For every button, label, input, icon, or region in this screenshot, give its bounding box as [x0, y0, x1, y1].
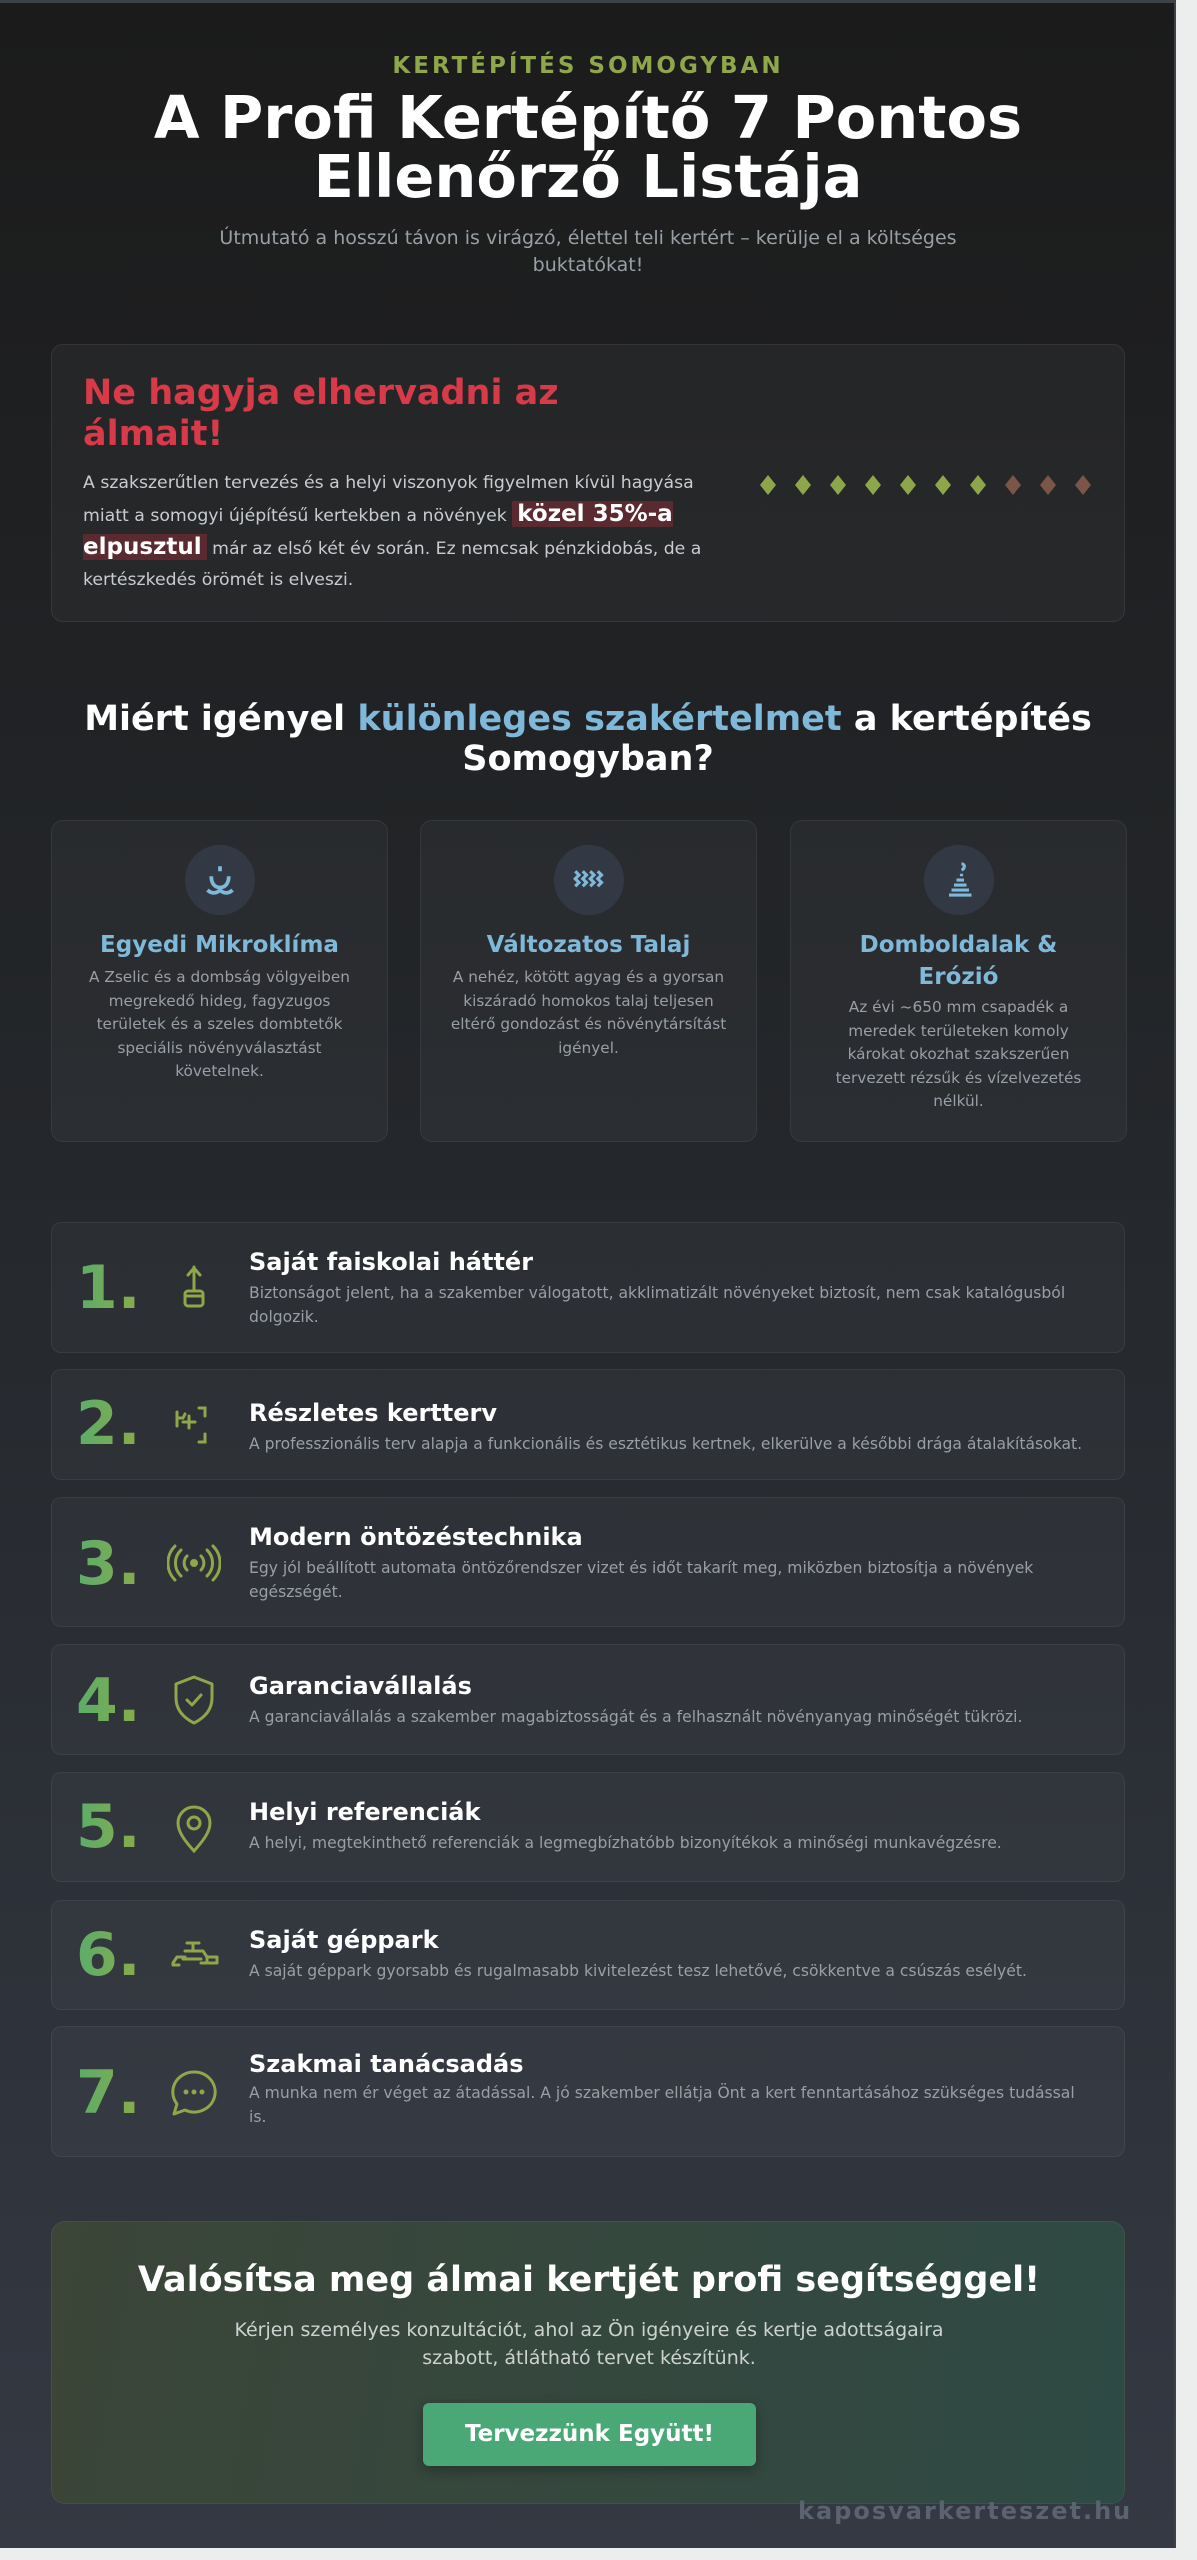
- icon: irrigation: [167, 1544, 221, 1582]
- item 7: A munka nem ér véget az átadással. A jó szakember ellátja Önt a kert fenntartásához szükséges tudással is.: [249, 2084, 1075, 2126]
- item 5: 5.: [76, 1792, 141, 1862]
- card: erozio: Az évi ~650 mm csapadék a meredek területeken komoly károkat okozhat szakszerűen tervezett rézsűk és vízelvezetés nélkül.: [836, 998, 1081, 1110]
- title: Ellenőrző Listája: [314, 142, 862, 211]
- footer url: kaposvarkerteszet.hu: [798, 2497, 1132, 2525]
- icon: plan: [176, 1406, 206, 1444]
- panel: CTA: [51, 2221, 1125, 2504]
- item 6: 6.: [76, 1920, 141, 1990]
- panel: alert: [51, 344, 1125, 622]
- item 1: Biztonságot jelent, ha a szakember válogatott, akklimatizált növényeket biztosít, nem csak katalógusból dolgozik.: [249, 1284, 1065, 1326]
- item 6: A saját géppark gyorsabb és rugalmasabb kivitelezést tesz lehetővé, csökkentve a csúszás esélyét.: [249, 1962, 1027, 1980]
- icon: slope: [924, 845, 994, 915]
- title: A Profi Kertépítő 7 Pontos: [154, 83, 1022, 152]
- alert heading: Ne hagyja elhervadni az álmait!: [83, 373, 559, 454]
- card: mikroklima: A Zselic és a dombság völgyeiben megrekedő hideg, fagyzugos területek és a szeles dombtetők speciális növényválasztást követelnek.: [89, 968, 350, 1080]
- card: erozio: Domboldalak &: [860, 932, 1057, 958]
- item 6: [51, 1900, 1125, 2010]
- CTA heading: Valósítsa meg álmai kertjét profi segítséggel!: [138, 2260, 1040, 2300]
- kicker: KERTÉPÍTÉS SOMOGYBAN: [392, 53, 784, 79]
- diamond chart: 7 of 10: [760, 475, 1091, 495]
- CTA button: Tervezzünk Együtt!: [465, 2421, 714, 2447]
- item 4: A garanciavállalás a szakember magabiztosságát és a felhasznált növényanyag minőségét tükrözi.: [249, 1708, 1022, 1726]
- item 1: Saját faiskolai háttér: [249, 1248, 533, 1276]
- CTA text: Kérjen személyes konzultációt, ahol az Ön igényeire és kertje adottságaira szabott, átlátható tervet készítünk.: [234, 2319, 944, 2369]
- item 7: Szakmai tanácsadás: [249, 2050, 524, 2078]
- title: [154, 83, 1022, 211]
- icon: sapling: [184, 1266, 204, 1308]
- item 3: Egy jól beállított automata öntözőrendszer vizet és időt takarít meg, miközben biztosítja a növények egészségét.: [249, 1559, 1033, 1601]
- item 2: A professzionális terv alapja a funkcionális és esztétikus kertnek, elkerülve a későbbi drága átalakításokat.: [249, 1435, 1082, 1453]
- item 5: Helyi referenciák: [249, 1798, 480, 1826]
- item 1: 1.: [76, 1253, 141, 1323]
- CTA button: [423, 2403, 756, 2466]
- alert text: A szakszerűtlen tervezés és a helyi viszonyok figyelmen kívül hagyása miatt a somogyi újépítésű kertekben a növények közel 35%-a elpusztul már az első két év során. Ez nemcsak pénzkidobás, de a kertészkedés örömét is elveszi.: [83, 473, 701, 590]
- item 1: [51, 1222, 1125, 1353]
- card: erozio: Erózió: [919, 964, 998, 990]
- item 3: [51, 1497, 1125, 1627]
- icon: climate: [185, 845, 255, 915]
- card: mikroklima: Egyedi Mikroklíma: [100, 932, 339, 958]
- icon: shield: [174, 1676, 214, 1724]
- card: erozio: [790, 820, 1127, 1142]
- item 4: 4.: [76, 1666, 141, 1736]
- icon: soil: [554, 845, 624, 915]
- card: talaj: [420, 820, 757, 1142]
- section heading: Miért igényel különleges szakértelmet a kertépítés Somogyban?: [84, 699, 1092, 779]
- item 2: Részletes kertterv: [249, 1399, 497, 1427]
- item 3: 3.: [76, 1529, 141, 1599]
- subtitle: Útmutató a hosszú távon is virágzó, élettel teli kertért – kerülje el a költséges buktatókat!: [219, 227, 957, 276]
- item 2: 2.: [76, 1389, 141, 1459]
- item 2: [51, 1369, 1125, 1480]
- item 5: [51, 1772, 1125, 1882]
- item 7: [51, 2026, 1125, 2157]
- icon: chat: [171, 2070, 217, 2116]
- item 6: Saját géppark: [249, 1926, 439, 1954]
- icon: machinery: [172, 1942, 218, 1966]
- card: talaj: A nehéz, kötött agyag és a gyorsan kiszáradó homokos talaj teljesen eltérő gondozást és növénytársítást igényel.: [451, 968, 726, 1057]
- card: talaj: Változatos Talaj: [487, 932, 690, 958]
- item 7: 7.: [76, 2058, 141, 2128]
- card: mikroklima: [51, 820, 388, 1142]
- item 4: [51, 1644, 1125, 1755]
- item 4: Garanciavállalás: [249, 1672, 472, 1700]
- item 3: Modern öntözéstechnika: [249, 1523, 583, 1551]
- item 5: A helyi, megtekinthető referenciák a legmegbízhatóbb bizonyítékok a minőségi munkavégzésre.: [249, 1834, 1002, 1852]
- icon: location: [176, 1806, 212, 1854]
